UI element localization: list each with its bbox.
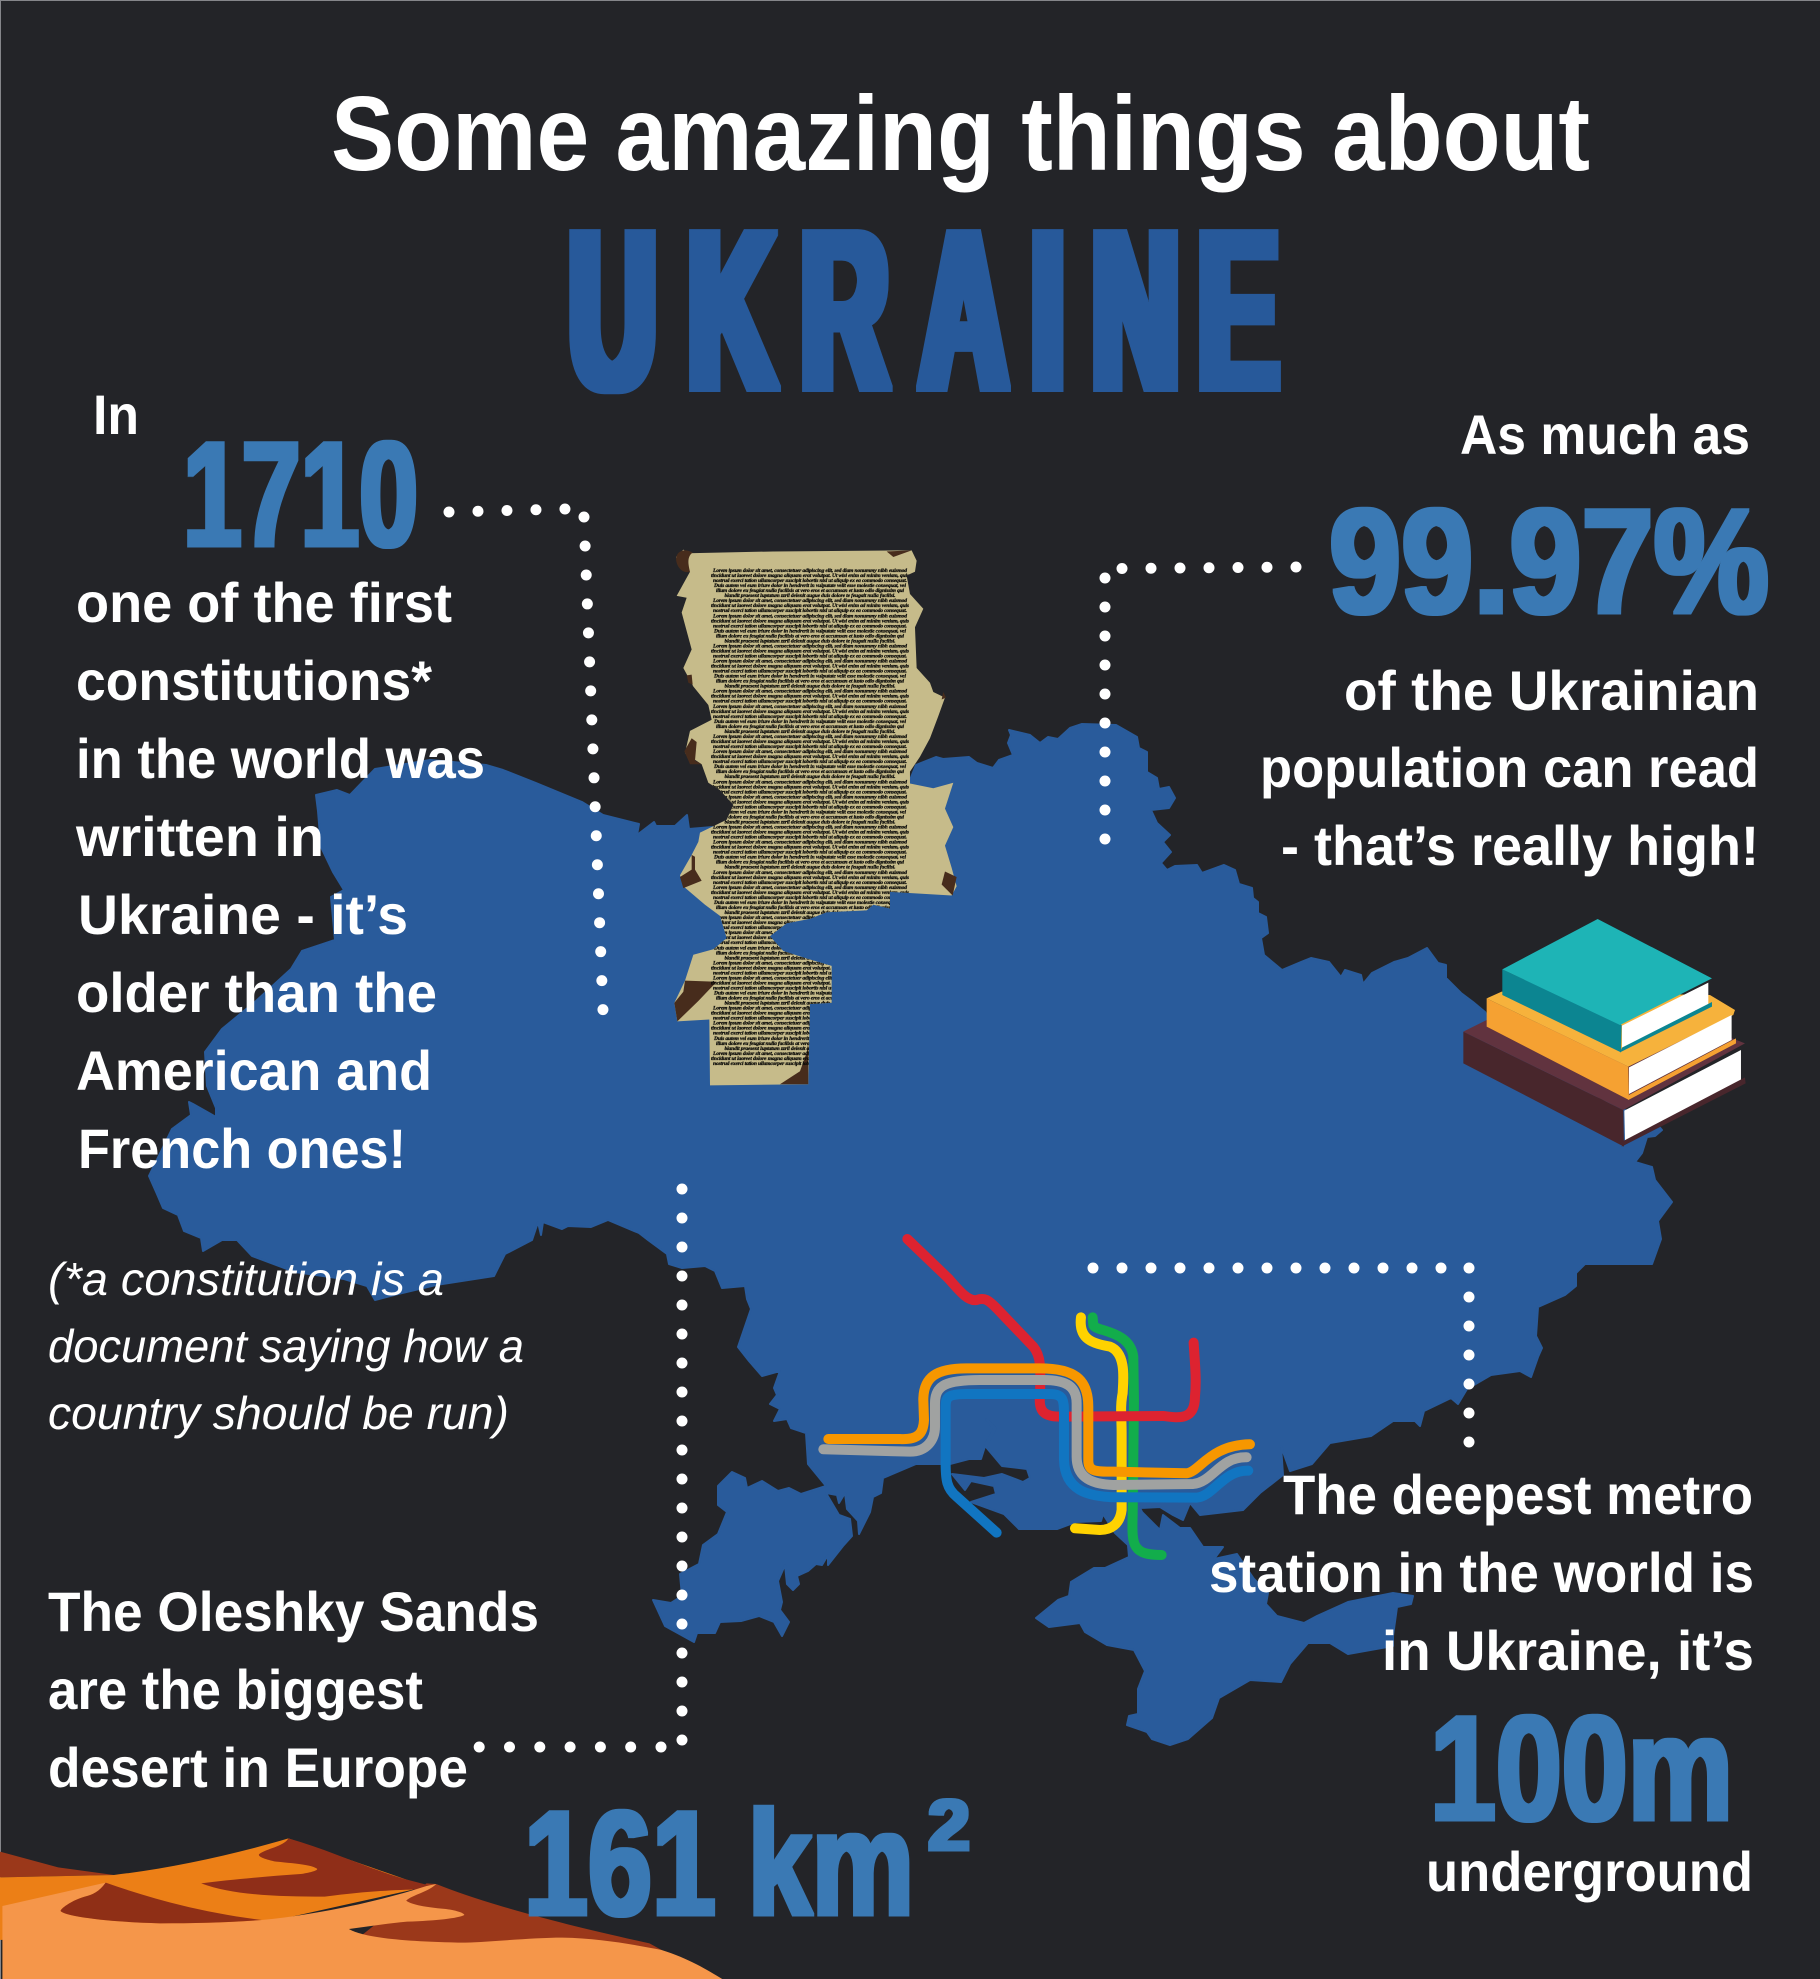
text block: literacy fact: population can read [1260, 736, 1759, 799]
text block: constitution fact: In [93, 383, 139, 446]
dotted connector: metro [1093, 1268, 1469, 1443]
paper lorem text: Lorem ipsum dolor sit amet, consectetuer adipiscing elit, sed diam nonummy nibh euismod [712, 1051, 907, 1057]
paper lorem text: tincidunt ut laoreet dolore magna aliquam erat volutpat. Ut wisi enim ad minim veniam, quis [711, 890, 909, 896]
paper lorem text: Lorem ipsum dolor sit amet, consectetuer adipiscing elit, sed diam nonummy nibh euismod [712, 613, 907, 619]
paper lorem text: tincidunt ut laoreet dolore magna aliquam erat volutpat. Ut wisi enim ad minim veniam, quis [711, 965, 909, 971]
paper lorem text: Lorem ipsum dolor sit amet, consectetuer adipiscing elit, sed diam nonummy nibh euismod [712, 734, 907, 740]
paper lorem text: Lorem ipsum dolor sit amet, consectetuer adipiscing elit, sed diam nonummy nibh euismod [712, 704, 907, 710]
paper lorem text: nostrud exerci tation ullamcorper suscipit lobortis nisl ut aliquip ex ea commodo consequat. [713, 699, 907, 705]
paper lorem text: tincidunt ut laoreet dolore magna aliquam erat volutpat. Ut wisi enim ad minim veniam, quis [711, 739, 909, 745]
paper lorem text: tincidunt ut laoreet dolore magna aliquam erat volutpat. Ut wisi enim ad minim veniam, quis [711, 709, 909, 715]
paper lorem text: illum dolore eu feugiat nulla facilisis at vero eros et accumsan et iusto odio dignissim qui [716, 633, 904, 639]
paper lorem text: tincidunt ut laoreet dolore magna aliquam erat volutpat. Ut wisi enim ad minim veniam, quis [711, 694, 909, 700]
paper lorem text: nostrud exerci tation ullamcorper suscipit lobortis nisl ut aliquip ex ea commodo consequat. [713, 940, 907, 946]
paper lorem text: tincidunt ut laoreet dolore magna aliquam erat volutpat. Ut wisi enim ad minim veniam, quis [711, 603, 909, 609]
paper lorem text: blandit praesent luptatum zzril delenit augue duis dolore te feugait nulla facilisi. [724, 774, 896, 780]
paper lorem text: nostrud exerci tation ullamcorper suscipit lobortis nisl ut aliquip ex ea commodo consequat. [713, 850, 907, 856]
icon: torn constitution paper [674, 550, 957, 1085]
paper lorem text: illum dolore eu feugiat nulla facilisis at vero eros et accumsan et iusto odio dignissim qui [716, 769, 904, 775]
text block: constitution fact: Ukraine - it’s [78, 883, 408, 946]
dotted connector: desert vertical [676, 1189, 688, 1741]
paper lorem text: blandit praesent luptatum zzril delenit augue duis dolore te feugait nulla facilisi. [724, 820, 896, 826]
paper lorem text: Duis autem vel eum iriure dolor in hendrerit in vulputate velit esse molestie consequat, vel [713, 719, 906, 725]
blue line [946, 1394, 1248, 1533]
paper lorem text: nostrud exerci tation ullamcorper suscipit lobortis nisl ut aliquip ex ea commodo consequat. [713, 789, 907, 795]
paper lorem text: nostrud exerci tation ullamcorper suscipit lobortis nisl ut aliquip ex ea commodo consequat. [713, 1031, 907, 1037]
text block: Oleshky Sands [48, 1580, 539, 1799]
text block: literacy fact: - that’s really high! [1281, 814, 1759, 877]
footnote: what a constitution is: (*a constitution is a [48, 1253, 444, 1305]
paper lorem text: Duis autem vel eum iriure dolor in hendrerit in vulputate velit esse molestie consequat, vel [713, 1036, 906, 1042]
paper lorem text: Lorem ipsum dolor sit amet, consectetuer adipiscing elit, sed diam nonummy nibh euismod [712, 749, 907, 755]
text block: constitution fact: constitutions* [76, 649, 432, 712]
text block: deepest metro fact: underground [1426, 1840, 1753, 1903]
paper lorem text: Lorem ipsum dolor sit amet, consectetuer adipiscing elit, sed diam nonummy nibh euismod [712, 779, 907, 785]
footnote: what a constitution is [48, 1253, 524, 1439]
title line: Some amazing things about [331, 75, 1590, 193]
green line [1093, 1317, 1162, 1555]
paper lorem text: Lorem ipsum dolor sit amet, consectetuer adipiscing elit, sed diam nonummy nibh euismod [712, 930, 907, 936]
text block: literacy fact: of the Ukrainian [1344, 659, 1759, 722]
text block: Oleshky Sands: are the biggest [48, 1658, 423, 1721]
stat: 100m: 100m [1430, 1684, 1733, 1852]
paper lorem text: tincidunt ut laoreet dolore magna aliquam erat volutpat. Ut wisi enim ad minim veniam, quis [711, 664, 909, 670]
paper lorem text: blandit praesent luptatum zzril delenit augue duis dolore te feugait nulla facilisi. [724, 729, 896, 735]
text block: deepest metro fact: The deepest metro [1283, 1463, 1753, 1526]
footnote: what a constitution is: document saying how a [48, 1320, 524, 1372]
paper lorem text: tincidunt ut laoreet dolore magna aliquam erat volutpat. Ut wisi enim ad minim veniam, quis [711, 845, 909, 851]
metro lines [823, 1239, 1250, 1555]
text block: deepest metro fact [1209, 1463, 1754, 1903]
paper lorem text: Lorem ipsum dolor sit amet, consectetuer adipiscing elit, sed diam nonummy nibh euismod [712, 643, 907, 649]
paper lorem text: Duis autem vel eum iriure dolor in hendrerit in vulputate velit esse molestie consequat, vel [713, 900, 906, 906]
title word: UKRAINE: UKRAINE [569, 183, 1279, 438]
paper lorem text: Duis autem vel eum iriure dolor in hendrerit in vulputate velit esse molestie consequat, vel [713, 764, 906, 770]
paper lorem text: nostrud exerci tation ullamcorper suscipit lobortis nisl ut aliquip ex ea commodo consequat. [713, 578, 907, 584]
paper lorem text: Lorem ipsum dolor sit amet, consectetuer adipiscing elit, sed diam nonummy nibh euismod [712, 794, 907, 800]
paper lorem text: tincidunt ut laoreet dolore magna aliquam erat volutpat. Ut wisi enim ad minim veniam, quis [711, 784, 909, 790]
paper lorem text: tincidunt ut laoreet dolore magna aliquam erat volutpat. Ut wisi enim ad minim veniam, quis [711, 935, 909, 941]
paper lorem text: blandit praesent luptatum zzril delenit augue duis dolore te feugait nulla facilisi. [724, 638, 896, 644]
paper lorem text: nostrud exerci tation ullamcorper suscipit lobortis nisl ut aliquip ex ea commodo consequat. [713, 985, 907, 991]
orange line [828, 1368, 1250, 1473]
paper lorem text: Duis autem vel eum iriure dolor in hendrerit in vulputate velit esse molestie consequat, vel [713, 809, 906, 815]
dotted connector: desert horizontal [479, 1742, 661, 1752]
red line [907, 1239, 1196, 1417]
paper lorem text: Lorem ipsum dolor sit amet, consectetuer adipiscing elit, sed diam nonummy nibh euismod [712, 658, 907, 664]
paper lorem text: illum dolore eu feugiat nulla facilisis at vero eros et accumsan et iusto odio dignissim qui [716, 1041, 904, 1047]
paper lorem text: Lorem ipsum dolor sit amet, consectetuer adipiscing elit, sed diam nonummy nibh euismod [712, 1006, 907, 1012]
paper lorem text: Duis autem vel eum iriure dolor in hendrerit in vulputate velit esse molestie consequat, vel [713, 855, 906, 861]
paper lorem text: Duis autem vel eum iriure dolor in hendrerit in vulputate velit esse molestie consequat, vel [713, 583, 906, 589]
dotted connector: literacy to map [1105, 567, 1296, 841]
paper lorem text: blandit praesent luptatum zzril delenit augue duis dolore te feugait nulla facilisi. [724, 955, 896, 961]
paper lorem text: nostrud exerci tation ullamcorper suscipit lobortis nisl ut aliquip ex ea commodo consequat. [713, 1016, 907, 1022]
text block: constitution fact: in the world was [76, 727, 485, 790]
paper lorem text: tincidunt ut laoreet dolore magna aliquam erat volutpat. Ut wisi enim ad minim veniam, quis [711, 573, 909, 579]
paper lorem text: Lorem ipsum dolor sit amet, consectetuer adipiscing elit, sed diam nonummy nibh euismod [712, 568, 907, 574]
text block: constitution fact [75, 383, 485, 1180]
paper lorem text: Lorem ipsum dolor sit amet, consectetuer adipiscing elit, sed diam nonummy nibh euismod [712, 870, 907, 876]
paper lorem text: nostrud exerci tation ullamcorper suscipit lobortis nisl ut aliquip ex ea commodo consequat. [713, 970, 907, 976]
paper lorem text: Lorem ipsum dolor sit amet, consectetuer adipiscing elit, sed diam nonummy nibh euismod [712, 975, 907, 981]
paper lorem text: Duis autem vel eum iriure dolor in hendrerit in vulputate velit esse molestie consequat, vel [713, 945, 906, 951]
paper lorem text: blandit praesent luptatum zzril delenit augue duis dolore te feugait nulla facilisi. [724, 684, 896, 690]
text block: constitution fact: American and [76, 1039, 432, 1102]
text block: constitution fact: written in [75, 805, 324, 868]
paper lorem text: Lorem ipsum dolor sit amet, consectetuer adipiscing elit, sed diam nonummy nibh euismod [712, 598, 907, 604]
paper lorem text: Duis autem vel eum iriure dolor in hendrerit in vulputate velit esse molestie consequat, vel [713, 674, 906, 680]
stat: 1710: 1710 [183, 410, 418, 578]
icon: stack of books [1463, 919, 1746, 1147]
paper lorem text: nostrud exerci tation ullamcorper suscipit lobortis nisl ut aliquip ex ea commodo consequat. [713, 804, 907, 810]
paper lorem text: nostrud exerci tation ullamcorper suscipit lobortis nisl ut aliquip ex ea commodo consequat. [713, 669, 907, 675]
paper lorem text: illum dolore eu feugiat nulla facilisis at vero eros et accumsan et iusto odio dignissim qui [716, 588, 904, 594]
stat: 161 km2: 161 km [524, 1779, 914, 1947]
text block: literacy fact [1260, 403, 1769, 877]
paper lorem text: nostrud exerci tation ullamcorper suscipit lobortis nisl ut aliquip ex ea commodo consequat. [713, 759, 907, 765]
paper lorem text: Lorem ipsum dolor sit amet, consectetuer adipiscing elit, sed diam nonummy nibh euismod [712, 885, 907, 891]
text block: constitution fact: French ones! [78, 1117, 406, 1180]
paper lorem text: nostrud exerci tation ullamcorper suscipit lobortis nisl ut aliquip ex ea commodo consequat. [713, 744, 907, 750]
paper lorem text: tincidunt ut laoreet dolore magna aliquam erat volutpat. Ut wisi enim ad minim veniam, quis [711, 1056, 909, 1062]
paper lorem text: nostrud exerci tation ullamcorper suscipit lobortis nisl ut aliquip ex ea commodo consequat. [713, 925, 907, 931]
paper lorem text: illum dolore eu feugiat nulla facilisis at vero eros et accumsan et iusto odio dignissim qui [716, 996, 904, 1002]
paper burn marks [674, 550, 957, 1084]
paper lorem text [711, 568, 909, 1067]
paper lorem text: illum dolore eu feugiat nulla facilisis at vero eros et accumsan et iusto odio dignissim qui [716, 815, 904, 821]
paper lorem text: nostrud exerci tation ullamcorper suscipit lobortis nisl ut aliquip ex ea commodo consequat. [713, 880, 907, 886]
text block: Oleshky Sands: desert in Europe [48, 1736, 468, 1799]
icon: desert dunes [0, 1838, 722, 1979]
paper lorem text: nostrud exerci tation ullamcorper suscipit lobortis nisl ut aliquip ex ea commodo consequat. [713, 714, 907, 720]
paper lorem text: tincidunt ut laoreet dolore magna aliquam erat volutpat. Ut wisi enim ad minim veniam, quis [711, 618, 909, 624]
paper lorem text: Lorem ipsum dolor sit amet, consectetuer adipiscing elit, sed diam nonummy nibh euismod [712, 960, 907, 966]
paper lorem text: Lorem ipsum dolor sit amet, consectetuer adipiscing elit, sed diam nonummy nibh euismod [712, 825, 907, 831]
paper lorem text: tincidunt ut laoreet dolore magna aliquam erat volutpat. Ut wisi enim ad minim veniam, quis [711, 920, 909, 926]
paper lorem text: tincidunt ut laoreet dolore magna aliquam erat volutpat. Ut wisi enim ad minim veniam, quis [711, 830, 909, 836]
paper lorem text: nostrud exerci tation ullamcorper suscipit lobortis nisl ut aliquip ex ea commodo consequat. [713, 608, 907, 614]
paper lorem text: nostrud exerci tation ullamcorper suscipit lobortis nisl ut aliquip ex ea commodo consequat. [713, 1061, 907, 1067]
text block: Oleshky Sands: The Oleshky Sands [48, 1580, 539, 1643]
paper lorem text: Duis autem vel eum iriure dolor in hendrerit in vulputate velit esse molestie consequat, vel [713, 990, 906, 996]
paper lorem text: blandit praesent luptatum zzril delenit augue duis dolore te feugait nulla facilisi. [724, 593, 896, 599]
paper lorem text: Lorem ipsum dolor sit amet, consectetuer adipiscing elit, sed diam nonummy nibh euismod [712, 840, 907, 846]
stat: 161 km2: 2 [928, 1786, 970, 1866]
paper lorem text: illum dolore eu feugiat nulla facilisis at vero eros et accumsan et iusto odio dignissim qui [716, 679, 904, 685]
paper lorem text: illum dolore eu feugiat nulla facilisis at vero eros et accumsan et iusto odio dignissim qui [716, 950, 904, 956]
text block: constitution fact: older than the [76, 961, 437, 1024]
map of Ukraine [149, 724, 1672, 1745]
paper lorem text: tincidunt ut laoreet dolore magna aliquam erat volutpat. Ut wisi enim ad minim veniam, quis [711, 980, 909, 986]
text block: deepest metro fact: station in the world is [1209, 1541, 1754, 1604]
paper lorem text: Lorem ipsum dolor sit amet, consectetuer adipiscing elit, sed diam nonummy nibh euismod [712, 689, 907, 695]
paper lorem text: tincidunt ut laoreet dolore magna aliquam erat volutpat. Ut wisi enim ad minim veniam, quis [711, 875, 909, 881]
paper lorem text: blandit praesent luptatum zzril delenit augue duis dolore te feugait nulla facilisi. [724, 1001, 896, 1007]
text block: literacy fact: As much as [1460, 403, 1750, 466]
paper lorem text: illum dolore eu feugiat nulla facilisis at vero eros et accumsan et iusto odio dignissim qui [716, 724, 904, 730]
paper lorem text: nostrud exerci tation ullamcorper suscipit lobortis nisl ut aliquip ex ea commodo consequat. [713, 654, 907, 660]
paper lorem text: illum dolore eu feugiat nulla facilisis at vero eros et accumsan et iusto odio dignissim qui [716, 905, 904, 911]
paper lorem text: Lorem ipsum dolor sit amet, consectetuer adipiscing elit, sed diam nonummy nibh euismod [712, 1021, 907, 1027]
grey line [823, 1380, 1247, 1485]
paper lorem text: tincidunt ut laoreet dolore magna aliquam erat volutpat. Ut wisi enim ad minim veniam, quis [711, 649, 909, 655]
paper lorem text: Duis autem vel eum iriure dolor in hendrerit in vulputate velit esse molestie consequat, vel [713, 628, 906, 634]
yellow line [1075, 1317, 1123, 1530]
paper lorem text: blandit praesent luptatum zzril delenit augue duis dolore te feugait nulla facilisi. [724, 1046, 896, 1052]
paper lorem text: nostrud exerci tation ullamcorper suscipit lobortis nisl ut aliquip ex ea commodo consequat. [713, 895, 907, 901]
paper lorem text: blandit praesent luptatum zzril delenit augue duis dolore te feugait nulla facilisi. [724, 865, 896, 871]
text block: deepest metro fact: in Ukraine, it’s [1382, 1619, 1754, 1682]
paper lorem text: Lorem ipsum dolor sit amet, consectetuer adipiscing elit, sed diam nonummy nibh euismod [712, 915, 907, 921]
paper lorem text: tincidunt ut laoreet dolore magna aliquam erat volutpat. Ut wisi enim ad minim veniam, quis [711, 1011, 909, 1017]
paper lorem text: tincidunt ut laoreet dolore magna aliquam erat volutpat. Ut wisi enim ad minim veniam, quis [711, 799, 909, 805]
paper sheet [674, 550, 957, 1085]
paper lorem text: tincidunt ut laoreet dolore magna aliquam erat volutpat. Ut wisi enim ad minim veniam, quis [711, 754, 909, 760]
dotted connector: 1710 to paper [449, 509, 603, 1011]
footnote: what a constitution is: country should be run) [48, 1387, 509, 1439]
paper lorem text: blandit praesent luptatum zzril delenit augue duis dolore te feugait nulla facilisi. [724, 910, 896, 916]
paper lorem text: tincidunt ut laoreet dolore magna aliquam erat volutpat. Ut wisi enim ad minim veniam, quis [711, 1026, 909, 1032]
text block: constitution fact: one of the first [76, 571, 452, 634]
paper lorem text: nostrud exerci tation ullamcorper suscipit lobortis nisl ut aliquip ex ea commodo consequat. [713, 623, 907, 629]
paper lorem text: nostrud exerci tation ullamcorper suscipit lobortis nisl ut aliquip ex ea commodo consequat. [713, 835, 907, 841]
paper lorem text: illum dolore eu feugiat nulla facilisis at vero eros et accumsan et iusto odio dignissim qui [716, 860, 904, 866]
